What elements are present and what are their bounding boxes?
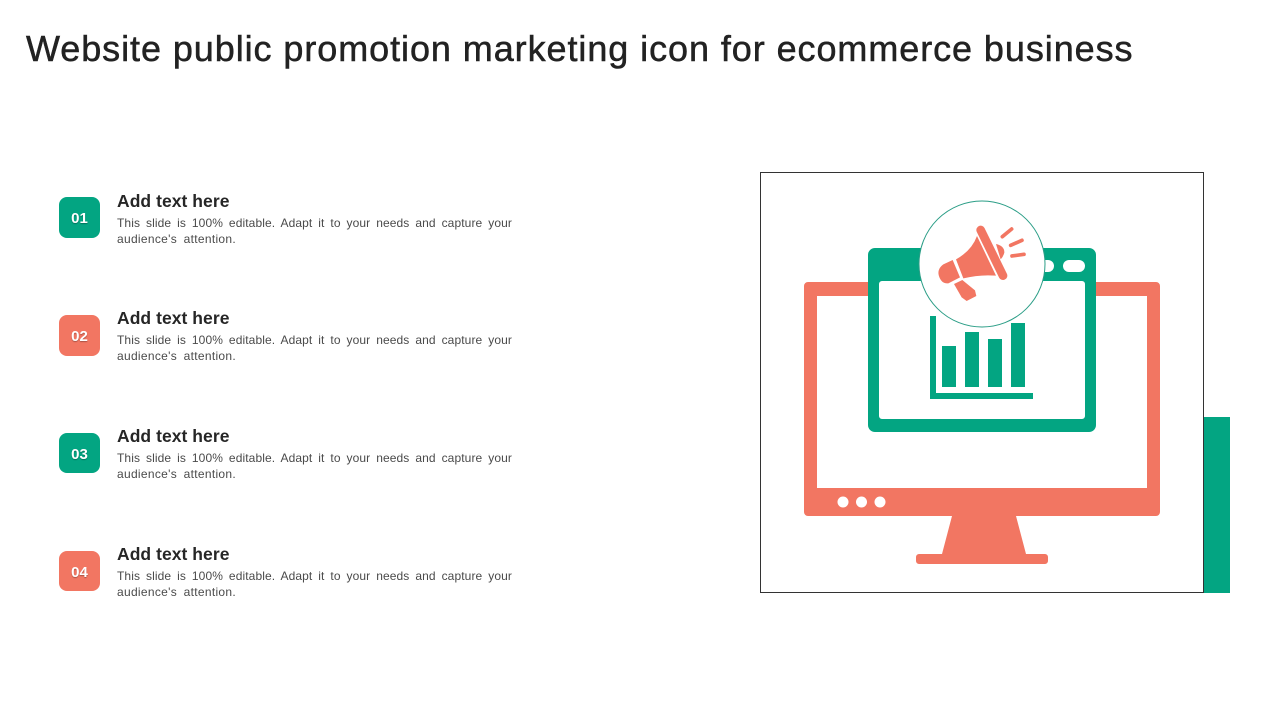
icon: megaphone in circle xyxy=(919,201,1045,327)
title: Website public promotion marketing icon for ecommerce business xyxy=(26,28,1133,69)
text 01: This slide is 100% editable. Adapt it to your needs and capture your xyxy=(117,216,512,230)
badge 03 xyxy=(59,433,100,473)
list item 01 xyxy=(59,191,512,246)
badge 04: 04 xyxy=(71,564,88,581)
icon: browser window xyxy=(868,248,1096,432)
text 02: audience's attention. xyxy=(117,349,236,363)
heading 02: Add text here xyxy=(117,308,229,328)
bar chart xyxy=(930,316,1033,399)
text 01 xyxy=(117,216,512,246)
badge 02 xyxy=(59,315,100,356)
green accent bar xyxy=(1204,417,1230,593)
text 04: audience's attention. xyxy=(117,585,236,599)
heading 04: Add text here xyxy=(117,544,229,564)
text 04: This slide is 100% editable. Adapt it to your needs and capture your xyxy=(117,569,512,583)
badge 02: 02 xyxy=(71,328,88,345)
badge 04 xyxy=(59,551,100,591)
text 03: audience's attention. xyxy=(117,467,236,481)
heading 01: Add text here xyxy=(117,191,229,211)
icon: desktop monitor xyxy=(804,282,1160,564)
text 03 xyxy=(117,451,512,481)
list item 04 xyxy=(59,544,512,599)
text 04 xyxy=(117,569,512,599)
text 01: audience's attention. xyxy=(117,232,236,246)
badge 01: 01 xyxy=(71,210,88,227)
list item 03 xyxy=(59,426,512,481)
text 02 xyxy=(117,333,512,363)
text 02: This slide is 100% editable. Adapt it to your needs and capture your xyxy=(117,333,512,347)
list item 02 xyxy=(59,308,512,363)
badge 03: 03 xyxy=(71,446,88,463)
text 03: This slide is 100% editable. Adapt it to your needs and capture your xyxy=(117,451,512,465)
panel frame xyxy=(760,172,1204,592)
heading 03: Add text here xyxy=(117,426,229,446)
badge 01 xyxy=(59,197,100,238)
